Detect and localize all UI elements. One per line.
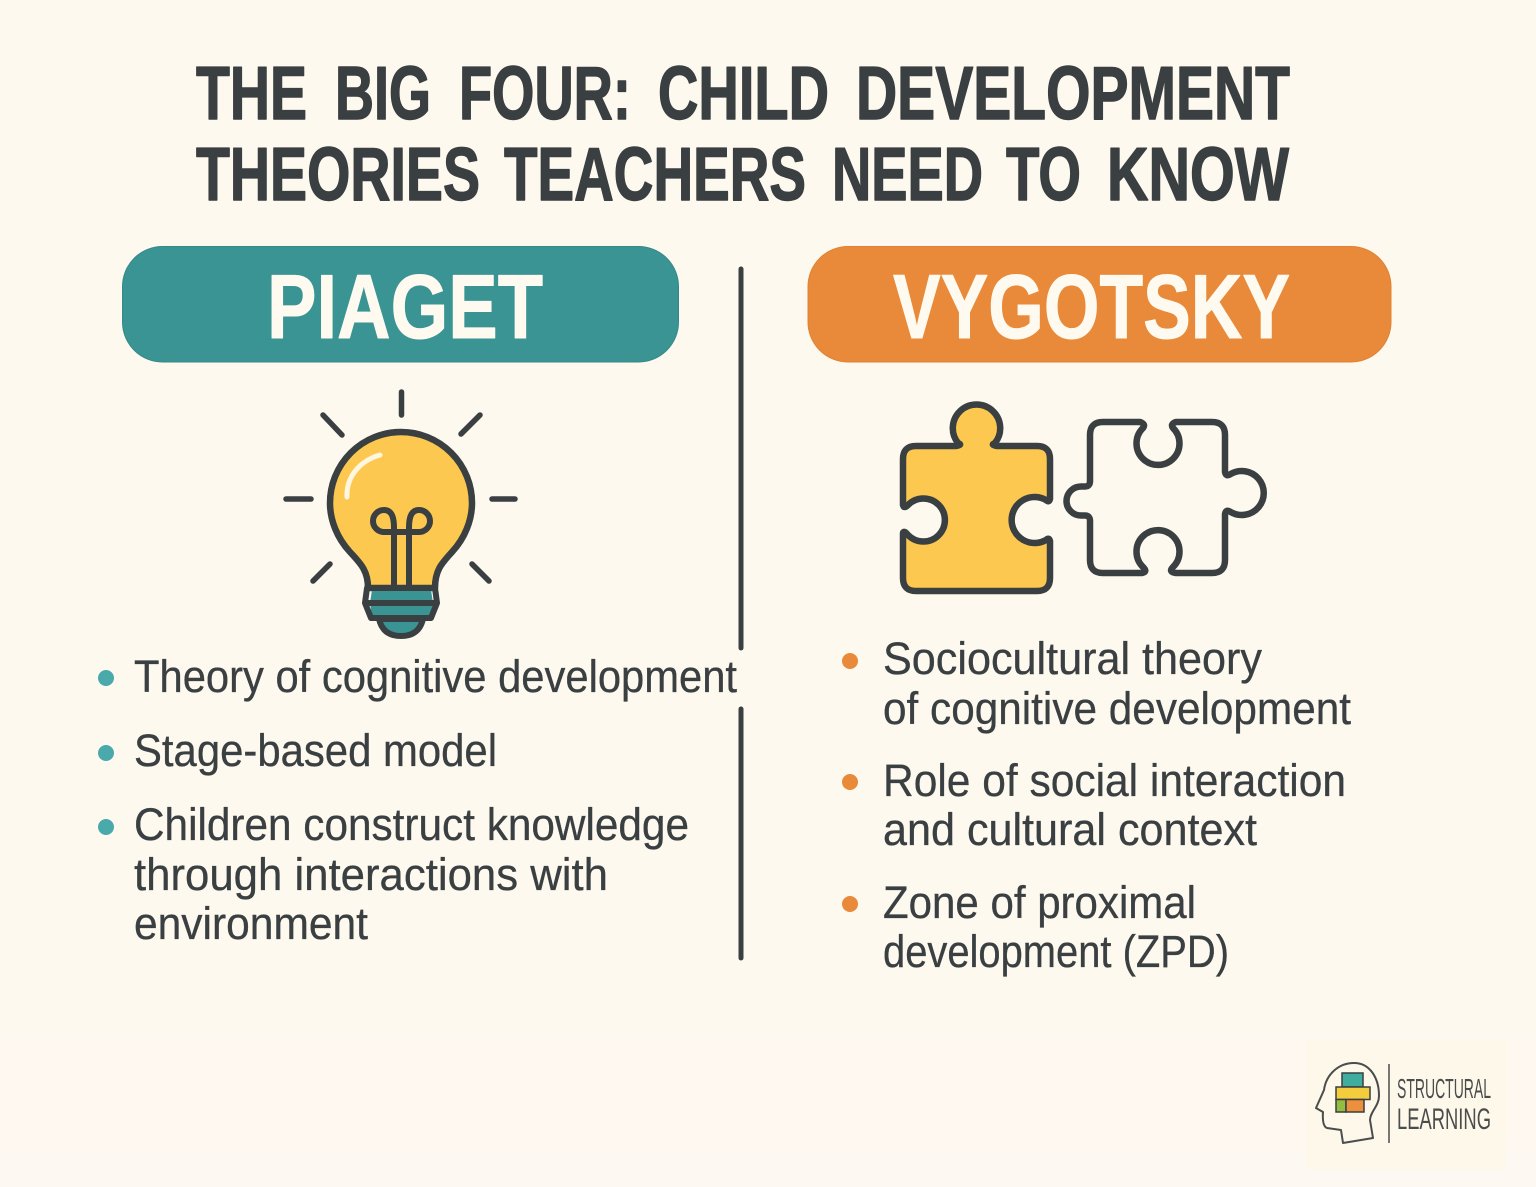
heading: Piaget: PIAGET [267, 257, 543, 358]
title: TEACHERS [504, 132, 806, 216]
icon: light bulb [286, 392, 515, 636]
title: NEED [832, 132, 983, 216]
bullet: sociocultural theory: Sociocultural theory [883, 633, 1262, 684]
bullet: sociocultural theory [842, 633, 1351, 734]
title: THE [196, 51, 307, 135]
bullet: zone of proximal development: development (ZPD) [883, 926, 1229, 977]
bullet: role of social interaction [842, 755, 1346, 855]
title: THEORIES [196, 132, 480, 216]
bullet: children construct knowledge: environment [134, 898, 368, 949]
logo wordmark [1397, 1073, 1491, 1136]
title: TO [1006, 132, 1081, 216]
bullet: theory of cognitive development: Theory of cognitive development [134, 651, 737, 702]
title: CHILD [658, 51, 829, 135]
bullet: children construct knowledge [98, 799, 689, 949]
icon: head with blocks [1316, 1063, 1379, 1143]
bullet: children construct knowledge: Children construct knowledge [134, 799, 689, 850]
title: KNOW [1107, 132, 1289, 216]
title: DEVELOPMENT [856, 51, 1290, 135]
bullet: role of social interaction: and cultural context [883, 804, 1257, 855]
panel: Vygotsky [808, 246, 1391, 977]
bullet list: Vygotsky [842, 633, 1351, 977]
heading: Piaget [122, 246, 678, 362]
icon: puzzle pieces [903, 404, 1264, 591]
heading: Vygotsky: VYGOTSKY [893, 257, 1290, 358]
bullet: stage-based model: Stage-based model [134, 725, 497, 776]
bullet: zone of proximal development: Zone of proximal [883, 877, 1196, 928]
bullet: sociocultural theory: of cognitive development [883, 683, 1351, 734]
logo: Structural Learning [1306, 1040, 1506, 1170]
bullet list: Piaget [98, 651, 737, 949]
divider [738, 269, 744, 958]
panel: Piaget [98, 246, 737, 949]
bullet: role of social interaction: Role of social interaction [883, 755, 1346, 806]
title [196, 51, 1290, 216]
bullet: zone of proximal development [842, 877, 1229, 977]
title: BIG [335, 51, 431, 135]
bullet: children construct knowledge: through interactions with [134, 849, 608, 900]
title: FOUR: [459, 51, 631, 135]
